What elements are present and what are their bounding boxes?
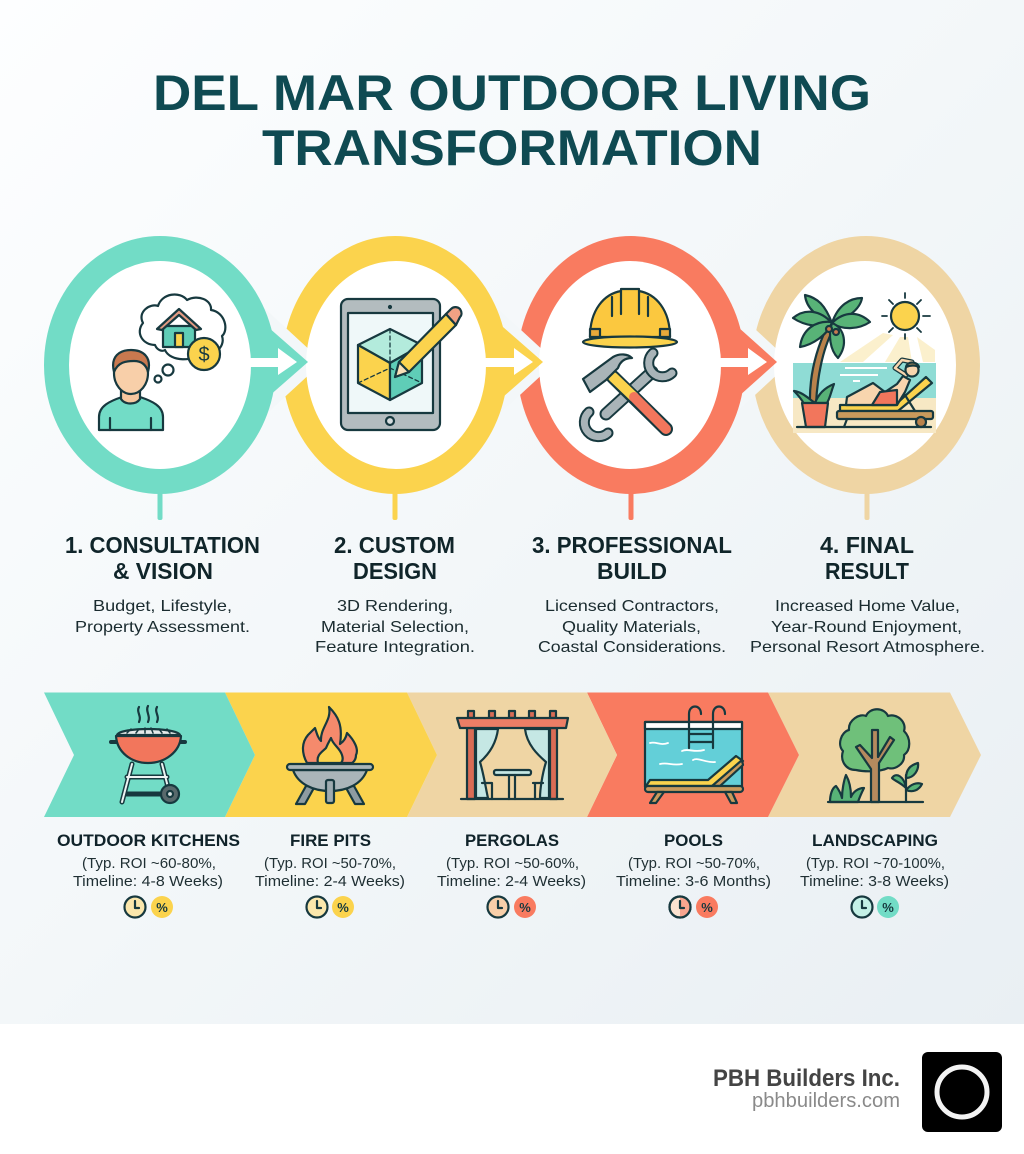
- step 3 text: Quality Materials,: [562, 619, 701, 636]
- icon: beach resort scene with palm, sun and lounger: [793, 293, 936, 433]
- step 4 text: Year-Round Enjoyment,: [771, 619, 962, 636]
- service label: landscaping: [800, 831, 949, 890]
- step 1 text: & VISION: [113, 558, 213, 584]
- service label: pools: Timeline: 3-6 Months): [616, 873, 771, 890]
- service label: pools: POOLS: [664, 831, 723, 850]
- icon: tablet with 3D cube and pencil: [341, 299, 462, 430]
- icon: tree and plants: [828, 709, 923, 802]
- badges: outdoor kitchens: [124, 896, 173, 918]
- step 4 text: 4. FINAL: [820, 532, 914, 558]
- service label: pergolas: (Typ. ROI ~50-60%,: [446, 855, 579, 872]
- footer: PBH Builders Inc.: [713, 1065, 900, 1092]
- step 2 text: Feature Integration.: [315, 639, 475, 656]
- service label: fire pits: FIRE PITS: [290, 831, 371, 850]
- service label: outdoor kitchens: [57, 831, 240, 890]
- step 2 text: 3D Rendering,: [337, 598, 453, 615]
- icon: hard hat, hammer and wrench: [583, 289, 677, 437]
- badges: fire pits: [306, 896, 354, 918]
- badges: fire pits: %: [337, 900, 349, 915]
- step 1 text: Property Assessment.: [75, 619, 250, 636]
- step 3 text: Licensed Contractors,: [545, 598, 719, 615]
- service label: outdoor kitchens: Timeline: 4-8 Weeks): [73, 873, 223, 890]
- badges: pools: [670, 896, 718, 918]
- title: DEL MAR OUTDOOR LIVING: [153, 65, 871, 121]
- icon: person thinking of house and budget: $: [198, 344, 210, 366]
- icon: fire pit: [287, 707, 373, 804]
- service label: landscaping: (Typ. ROI ~70-100%,: [806, 855, 945, 872]
- service label: pergolas: [437, 831, 586, 890]
- step 4 text: [750, 532, 985, 656]
- footer: pbhbuilders.com: [752, 1090, 900, 1112]
- service label: fire pits: Timeline: 2-4 Weeks): [255, 873, 405, 890]
- step 3 text: Coastal Considerations.: [538, 639, 726, 656]
- badges: pools: %: [701, 900, 713, 915]
- step 1 text: Budget, Lifestyle,: [93, 598, 232, 615]
- footer: [0, 1024, 1024, 1154]
- badges: pergolas: [488, 896, 536, 918]
- badges: landscaping: %: [882, 900, 894, 915]
- step 1 text: [65, 532, 260, 636]
- step 1 text: 1. CONSULTATION: [65, 532, 260, 558]
- step 3 text: BUILD: [597, 558, 667, 584]
- title: [153, 65, 871, 176]
- step 2 text: 2. CUSTOM: [334, 532, 455, 558]
- service label: fire pits: [255, 831, 405, 890]
- step 4 text: RESULT: [825, 558, 909, 584]
- stage 2 ring: custom design: [270, 236, 543, 520]
- step 2 text: [315, 532, 475, 656]
- service label: pools: [616, 831, 771, 890]
- icon: person thinking of house and budget: [99, 294, 225, 430]
- step 3 text: 3. PROFESSIONAL: [532, 532, 732, 558]
- step 4 text: Personal Resort Atmosphere.: [750, 639, 985, 656]
- step 2 text: DESIGN: [353, 558, 437, 584]
- badges: landscaping: [852, 896, 899, 918]
- icon: pergola: [457, 711, 568, 799]
- badges: pergolas: %: [519, 900, 531, 915]
- icon: pool with ladder and lounger: [645, 706, 743, 803]
- service label: landscaping: LANDSCAPING: [812, 831, 938, 850]
- stage 3 ring: professional build: [503, 236, 777, 520]
- icon: grill: [111, 706, 185, 803]
- step 4 text: Increased Home Value,: [775, 598, 960, 615]
- service label: fire pits: (Typ. ROI ~50-70%,: [264, 855, 396, 872]
- service label: landscaping: Timeline: 3-8 Weeks): [800, 873, 949, 890]
- service label: outdoor kitchens: (Typ. ROI ~60-80%,: [82, 855, 216, 872]
- stage 1 ring: consultation: [44, 236, 308, 520]
- title: TRANSFORMATION: [262, 120, 762, 176]
- badges: outdoor kitchens: %: [156, 900, 168, 915]
- step 2 text: Material Selection,: [321, 619, 469, 636]
- service label: pools: (Typ. ROI ~50-70%,: [628, 855, 760, 872]
- stage 4 ring: final result: [738, 236, 980, 520]
- service label: outdoor kitchens: OUTDOOR KITCHENS: [57, 831, 240, 850]
- chevron band: [44, 692, 981, 817]
- step 3 text: [532, 532, 732, 656]
- service label: pergolas: PERGOLAS: [465, 831, 559, 850]
- service label: pergolas: Timeline: 2-4 Weeks): [437, 873, 586, 890]
